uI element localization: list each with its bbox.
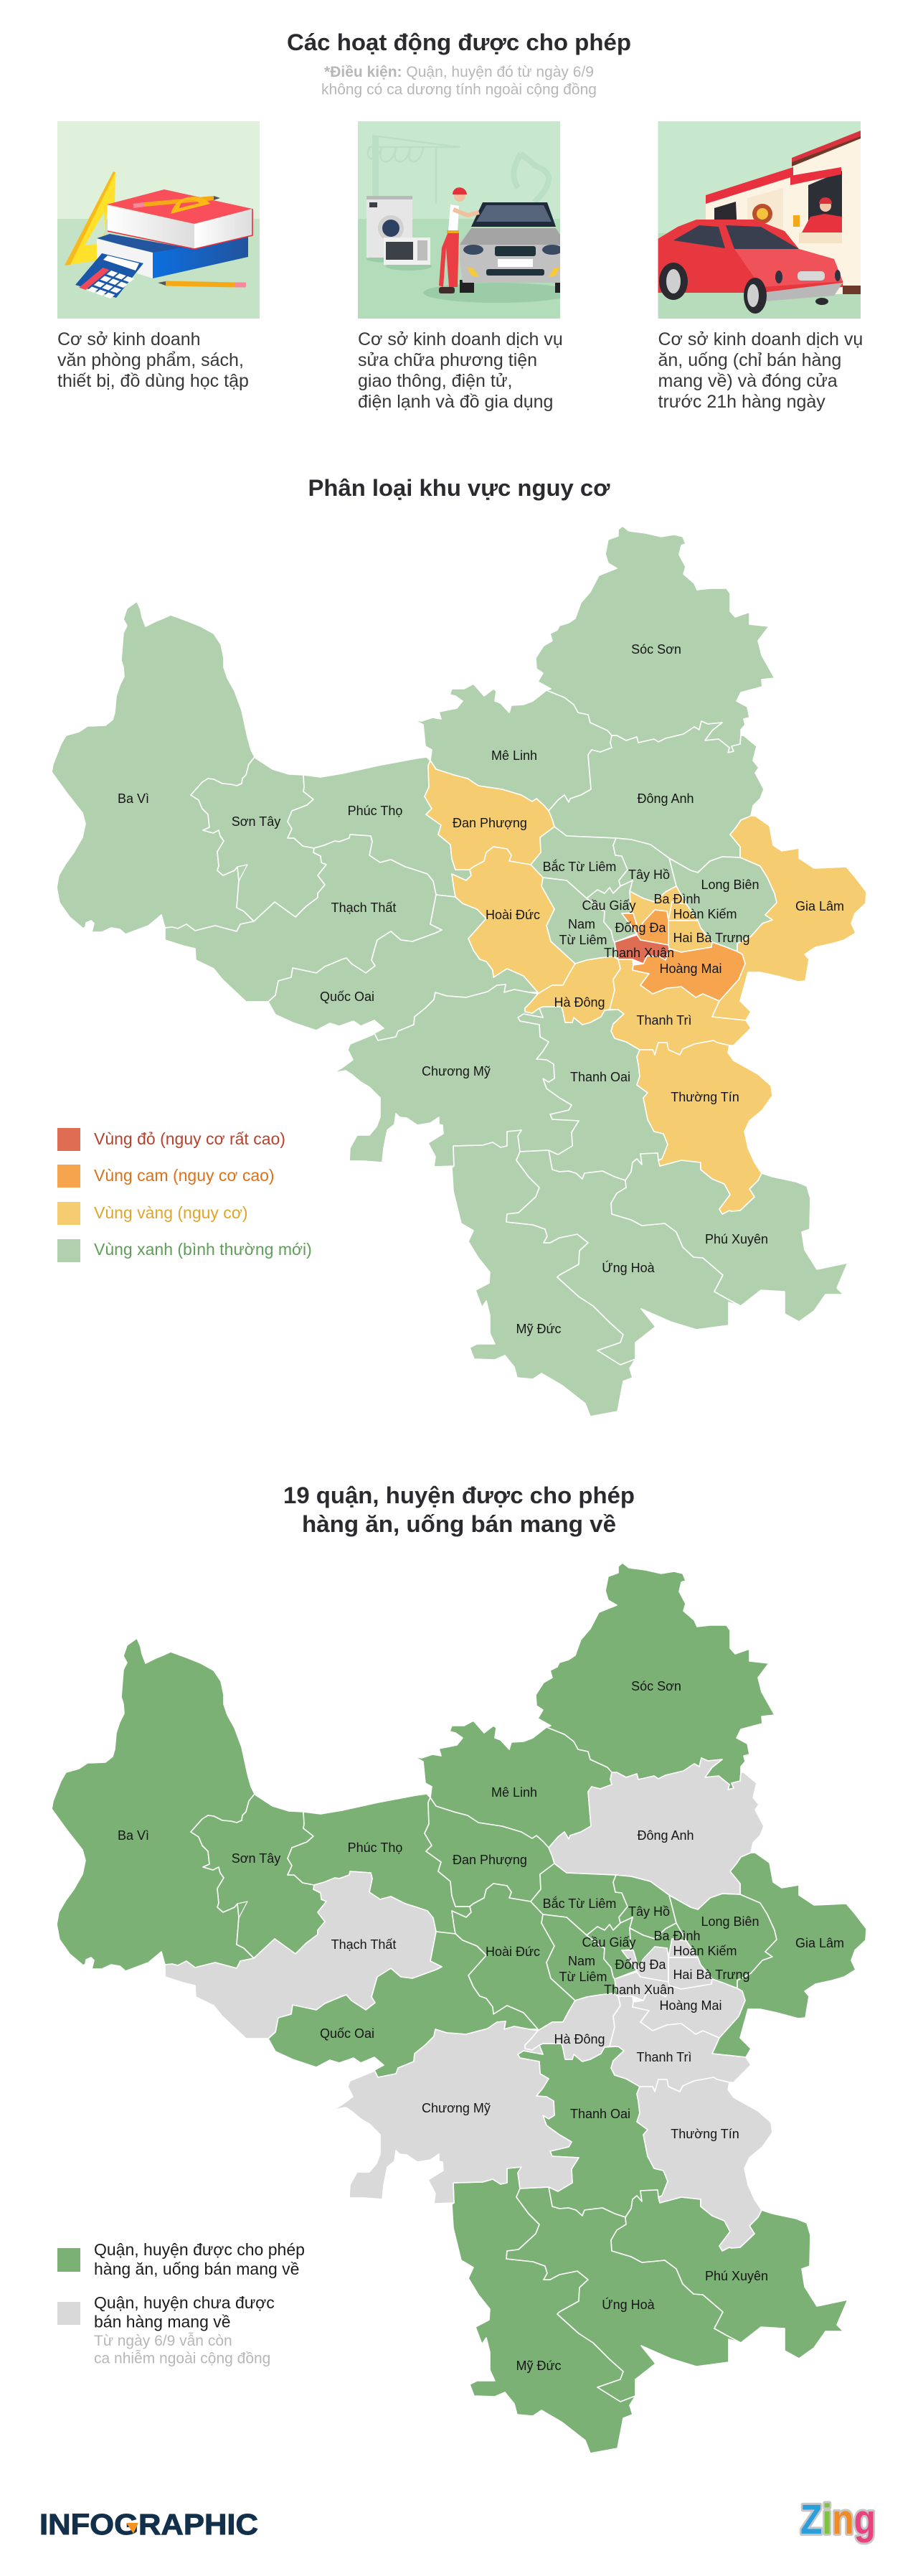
legend item: orange bbox=[57, 1165, 275, 1188]
district labels: risk map: Tây Hồ bbox=[628, 868, 670, 882]
district labels: risk map: Hoàn Kiếm bbox=[673, 907, 737, 921]
district labels: risk map: Hoàng Mai bbox=[659, 962, 722, 976]
district labels: risk map: Hoài Đức bbox=[486, 908, 540, 922]
legend: risk zones bbox=[57, 1128, 312, 1262]
district labels: take-away map: Hà Đông bbox=[554, 2032, 605, 2046]
district labels: take-away map: Bắc Từ Liêm bbox=[543, 1896, 616, 1911]
district labels: take-away map: Thanh Oai bbox=[570, 2107, 630, 2121]
district labels: take-away map: Thạch Thất bbox=[331, 1937, 396, 1952]
legend item: allowed: Quận, huyện được cho phép bbox=[94, 2240, 305, 2259]
district labels: take-away map: Long Biên bbox=[701, 1914, 760, 1929]
legend item: not allowed: Quận, huyện chưa được bbox=[94, 2293, 275, 2312]
district labels: risk map: Thanh Xuân bbox=[604, 946, 674, 960]
district labels: take-away map: Hai Bà Trưng bbox=[673, 1968, 750, 1982]
district labels: take-away map: Từ Liêm bbox=[559, 1970, 607, 1984]
district labels: take-away map: Ứng Hoà bbox=[602, 2297, 656, 2312]
district labels: take-away map: Hoàng Mai bbox=[659, 1998, 722, 2013]
logo: Zing: Zing bbox=[800, 2496, 876, 2543]
legend item: allowed bbox=[57, 2240, 305, 2278]
district labels: take-away map: Chương Mỹ bbox=[422, 2101, 491, 2115]
caption: food and drink: mang về) và đóng cửa bbox=[658, 371, 838, 391]
legend item: red bbox=[57, 1128, 285, 1151]
legend item: red: Vùng đỏ (nguy cơ rất cao) bbox=[94, 1129, 285, 1148]
heading line two: hàng ăn, uống bán mang về bbox=[302, 1511, 616, 1537]
district labels: take-away map: Thường Tín bbox=[671, 2127, 739, 2141]
legend item: yellow bbox=[57, 1202, 248, 1225]
district labels: take-away map: Ba Đình bbox=[653, 1929, 701, 1943]
district labels: risk map: Từ Liêm bbox=[559, 933, 607, 947]
district labels: risk map: Cầu Giấy bbox=[582, 898, 636, 913]
district labels: risk map: Thanh Oai bbox=[570, 1070, 630, 1084]
district labels: take-away map bbox=[118, 1679, 844, 2373]
caption: repair services: giao thông, điện tử, bbox=[358, 371, 513, 391]
district labels: take-away map: Mê Linh bbox=[491, 1785, 537, 1800]
district labels: risk map: Thường Tín bbox=[671, 1090, 739, 1104]
district labels: risk map bbox=[118, 642, 844, 1336]
district labels: take-away map: Đan Phượng bbox=[453, 1853, 527, 1867]
district labels: risk map: Thạch Thất bbox=[331, 901, 396, 915]
panel: vehicle and appliance repair illustration bbox=[358, 121, 572, 319]
district labels: take-away map: Tây Hồ bbox=[628, 1904, 670, 1919]
district labels: take-away map: Hoài Đức bbox=[486, 1945, 540, 1959]
heading: risk zone classification: Phân loại khu vực nguy cơ bbox=[308, 475, 610, 501]
district labels: risk map: Hà Đông bbox=[554, 995, 605, 1010]
district labels: risk map: Quốc Oai bbox=[320, 989, 374, 1004]
district labels: risk map: Phúc Thọ bbox=[348, 804, 402, 818]
district labels: take-away map: Nam bbox=[568, 1954, 595, 1968]
caption: stationery: văn phòng phẩm, sách, bbox=[57, 350, 244, 370]
district labels: risk map: Nam bbox=[568, 917, 595, 931]
legend item: green bbox=[57, 1239, 312, 1262]
district labels: risk map: Mỹ Đức bbox=[516, 1322, 562, 1336]
legend item: not allowed: bán hàng mang về bbox=[94, 2312, 231, 2331]
map: risk zones of Hanoi bbox=[52, 526, 866, 1416]
district labels: take-away map: Gia Lâm bbox=[795, 1936, 844, 1950]
caption: food and drink: trước 21h hàng ngày bbox=[658, 392, 825, 412]
district labels: take-away map: Cầu Giấy bbox=[582, 1935, 636, 1950]
caption: food and drink: Cơ sở kinh doanh dịch vụ bbox=[658, 329, 863, 349]
caption: repair services: sửa chữa phương tiện bbox=[358, 350, 537, 370]
district labels: risk map: Phú Xuyên bbox=[705, 1232, 768, 1246]
legend item: yellow: Vùng vàng (nguy cơ) bbox=[94, 1203, 248, 1222]
caption: stationery: Cơ sở kinh doanh bbox=[57, 329, 201, 349]
district labels: take-away map: Quốc Oai bbox=[320, 2026, 374, 2041]
district labels: take-away map: Thanh Trì bbox=[636, 2050, 692, 2064]
district labels: take-away map: Đông Anh bbox=[637, 1828, 694, 1843]
district labels: take-away map: Sơn Tây bbox=[232, 1851, 280, 1866]
legend item: orange: Vùng cam (nguy cơ cao) bbox=[94, 1166, 275, 1185]
district labels: risk map: Ứng Hoà bbox=[602, 1260, 656, 1275]
caption: stationery: thiết bị, đồ dùng học tập bbox=[57, 371, 249, 391]
district labels: risk map: Ba Đình bbox=[653, 892, 701, 906]
district labels: take-away map: Thanh Xuân bbox=[604, 1983, 674, 1997]
district labels: risk map: Gia Lâm bbox=[795, 899, 844, 913]
caption: food and drink: ăn, uống (chỉ bán hàng bbox=[658, 350, 841, 370]
legend: take-away status bbox=[57, 2240, 305, 2366]
district labels: take-away map: Phú Xuyên bbox=[705, 2269, 768, 2283]
district labels: risk map: Thanh Trì bbox=[636, 1013, 692, 1028]
legend item: allowed: hàng ăn, uống bán mang về bbox=[94, 2260, 299, 2278]
condition note: *Điều kiện: Quận, huyện đó từ ngày 6/9 bbox=[324, 64, 594, 80]
district labels: risk map: Ba Vì bbox=[118, 791, 149, 806]
map: districts allowed to sell take-away bbox=[52, 1563, 866, 2453]
district labels: take-away map: Ba Vì bbox=[118, 1828, 149, 1843]
district labels: risk map: Bắc Từ Liêm bbox=[543, 859, 616, 874]
district labels: risk map: Long Biên bbox=[701, 878, 760, 892]
district labels: risk map: Đống Đa bbox=[615, 921, 667, 935]
legend note: Từ ngày 6/9 vẫn còn bbox=[94, 2333, 232, 2349]
district labels: risk map: Sơn Tây bbox=[232, 814, 280, 829]
caption: repair services: Cơ sở kinh doanh dịch vụ bbox=[358, 329, 563, 349]
panel: stationery and books illustration bbox=[57, 121, 260, 319]
district labels: take-away map: Phúc Thọ bbox=[348, 1841, 402, 1855]
district labels: take-away map: Hoàn Kiếm bbox=[673, 1944, 737, 1958]
caption: repair services: điện lạnh và đồ gia dụng bbox=[358, 392, 553, 412]
district labels: risk map: Đông Anh bbox=[637, 791, 694, 806]
heading: 19 districts allowed take-away: 19 quận, huyện được cho phép bbox=[283, 1482, 635, 1508]
district labels: take-away map: Sóc Sơn bbox=[631, 1679, 681, 1693]
district labels: take-away map: Đống Đa bbox=[615, 1957, 667, 1972]
district labels: risk map: Sóc Sơn bbox=[631, 642, 681, 657]
district labels: risk map: Đan Phượng bbox=[453, 816, 527, 830]
heading: allowed activities: Các hoạt động được cho phép bbox=[287, 29, 631, 55]
panel: take-away food illustration bbox=[658, 121, 861, 319]
legend item: not allowed bbox=[57, 2293, 275, 2331]
legend item: green: Vùng xanh (bình thường mới) bbox=[94, 1240, 312, 1259]
district labels: risk map: Hai Bà Trưng bbox=[673, 931, 750, 945]
condition note: không có ca dương tính ngoài cộng đồng bbox=[321, 82, 597, 98]
logo: infographic: INFOGRAPHIC bbox=[39, 2508, 258, 2541]
district labels: take-away map: Mỹ Đức bbox=[516, 2359, 562, 2373]
district labels: risk map: Chương Mỹ bbox=[422, 1064, 491, 1078]
district labels: risk map: Mê Linh bbox=[491, 748, 537, 763]
legend note: ca nhiễm ngoài cộng đồng bbox=[94, 2351, 270, 2366]
